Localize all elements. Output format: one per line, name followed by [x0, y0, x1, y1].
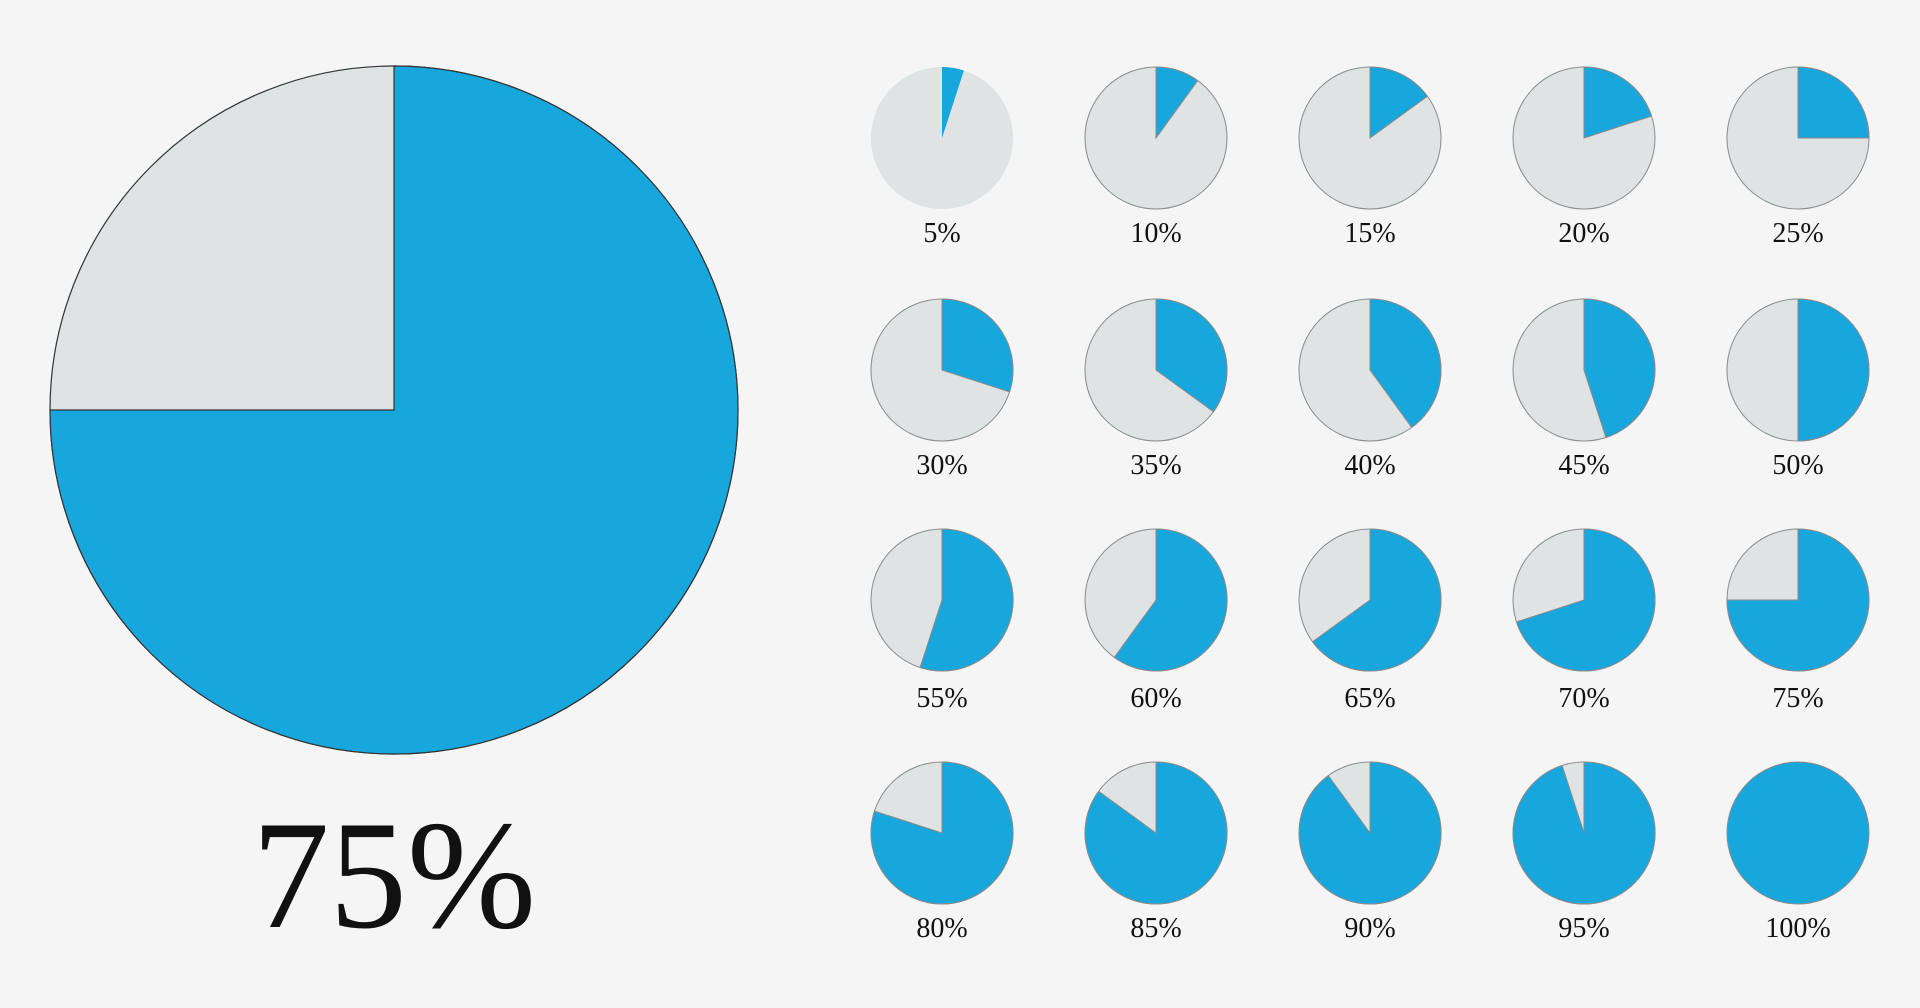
small pie labels: 20%	[1558, 218, 1610, 249]
pie 85%	[1085, 762, 1227, 904]
small pie labels: 10%	[1130, 218, 1182, 249]
small pie labels: 70%	[1558, 683, 1610, 714]
small pie grid	[871, 67, 1869, 904]
pie 5%	[871, 67, 1013, 209]
pie 100%	[1727, 762, 1869, 904]
small pie labels: 100%	[1765, 913, 1831, 944]
small pie labels: 55%	[916, 683, 968, 714]
pie 15%	[1299, 67, 1441, 209]
pie 30%	[871, 299, 1013, 441]
small pie labels: 25%	[1772, 218, 1824, 249]
pie 90%	[1299, 762, 1441, 904]
pie 60%	[1085, 529, 1227, 671]
pie 20%	[1513, 67, 1655, 209]
pie 10%	[1085, 67, 1227, 209]
small pie labels: 35%	[1130, 450, 1182, 481]
small pie labels: 80%	[916, 913, 968, 944]
small pie labels: 30%	[916, 450, 968, 481]
small pie labels: 40%	[1344, 450, 1396, 481]
small pie labels: 15%	[1344, 218, 1396, 249]
pie 75%	[1727, 529, 1869, 671]
small pie labels: 95%	[1558, 913, 1610, 944]
pie 25%	[1727, 67, 1869, 209]
pie 35%	[1085, 299, 1227, 441]
pie 70%	[1513, 529, 1655, 671]
small pie labels: 5%	[923, 218, 961, 249]
small pie labels: 60%	[1130, 683, 1182, 714]
small pie labels	[916, 218, 1831, 944]
small pie labels: 75%	[1772, 683, 1824, 714]
pie 80%	[871, 762, 1013, 904]
small pie labels: 65%	[1344, 683, 1396, 714]
pie 95%	[1513, 762, 1655, 904]
pie 55%	[871, 529, 1013, 671]
pie 40%	[1299, 299, 1441, 441]
small pie labels: 45%	[1558, 450, 1610, 481]
big pie chart 75%	[50, 66, 738, 754]
pie 50%	[1727, 299, 1869, 441]
big label 75%: 75%	[252, 789, 536, 961]
small pie labels: 50%	[1772, 450, 1824, 481]
small pie labels: 85%	[1130, 913, 1182, 944]
pie 65%	[1299, 529, 1441, 671]
small pie labels: 90%	[1344, 913, 1396, 944]
pie 45%	[1513, 299, 1655, 441]
